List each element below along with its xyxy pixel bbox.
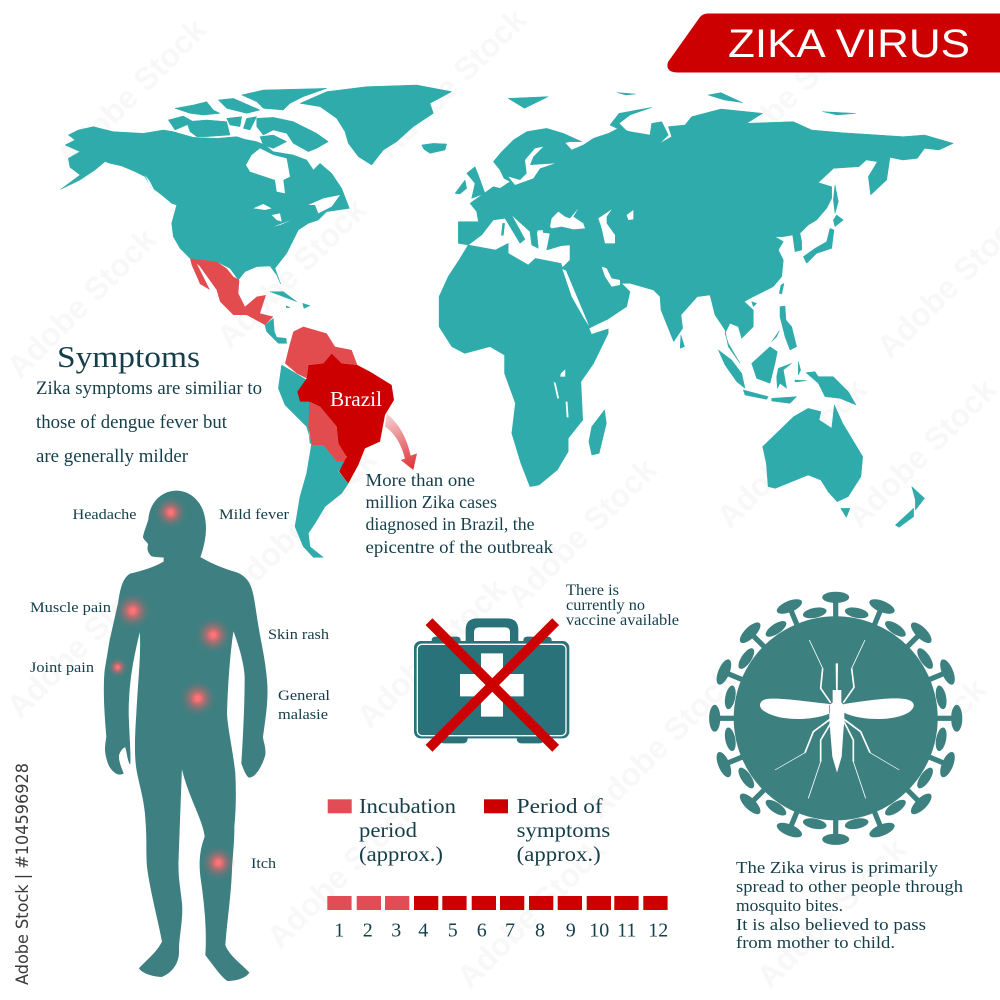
Great Lakes: [253, 204, 292, 227]
Eurasian landmass: [458, 109, 953, 363]
symptom labels: Mild fever: [219, 507, 289, 523]
medical cross: [460, 653, 524, 717]
symptom labels: Skin rash: [268, 627, 330, 643]
human body figure: [104, 491, 267, 981]
text block: symptoms description: Zika symptoms are similiar to: [36, 379, 262, 399]
text: Adobe Stock: [219, 441, 383, 605]
text block: Brazil cases: [366, 470, 553, 557]
timeline numbers: 11: [617, 920, 636, 942]
heading: Symptoms: Symptoms: [57, 339, 200, 374]
text block: transmission: The Zika virus is primarily: [736, 858, 939, 877]
text: Adobe Stock: [829, 671, 993, 835]
mosquito: [760, 640, 914, 798]
legend label: incubation: Incubation: [359, 794, 456, 818]
symptom labels: General: [278, 688, 330, 704]
text block: transmission: It is also believed to pass: [736, 915, 926, 934]
arrow from Brazil: [385, 413, 417, 470]
text block: transmission: [736, 858, 964, 952]
inland seas and gulfs: [508, 147, 633, 334]
Northern South America highlighted: [285, 327, 357, 378]
red X: [429, 622, 556, 748]
Caribbean: [270, 292, 310, 308]
timeline numbers: 12: [648, 920, 668, 942]
legend label: symptoms: [517, 794, 610, 866]
symptom point: knee: [201, 846, 235, 880]
text: Adobe Stock: [579, 661, 743, 825]
symptom labels: Itch: [251, 856, 277, 872]
symptom labels: Muscle pain: [30, 600, 112, 616]
text block: transmission: from mother to child.: [736, 933, 895, 952]
text block: Brazil cases: epicentre of the outbreak: [366, 537, 553, 557]
map: North America: [61, 88, 349, 284]
symptom point: elbow: [108, 657, 128, 677]
legend: [328, 794, 610, 866]
map: Greenland, Mexico, Central America: [190, 85, 452, 343]
Brazil label: Brazil: [330, 387, 382, 411]
legend label: symptoms: symptoms: [517, 818, 610, 842]
symptom labels: Headache: [72, 507, 136, 523]
text: Adobe Stock: [449, 831, 613, 995]
southern and polar islands: [508, 93, 924, 527]
African lakes: [554, 369, 569, 417]
title banner: [667, 14, 1000, 72]
map: South America: [278, 327, 417, 557]
text block: transmission: spread to other people through: [736, 877, 964, 896]
map: Eurasia: [455, 109, 953, 405]
symptom point: chest: [195, 617, 231, 653]
timeline numbers: 9: [566, 920, 576, 942]
symptom point: head: [155, 496, 187, 528]
kit handle: [466, 618, 518, 643]
text block: Brazil cases: More than one: [366, 470, 475, 490]
legend swatch: symptoms: [484, 799, 508, 813]
text block: Brazil cases: diagnosed in Brazil, the: [366, 514, 534, 534]
text: Adobe Stock: [0, 221, 163, 385]
Africa: [439, 243, 608, 487]
text block: symptoms description: are generally milder: [36, 447, 188, 467]
timeline numbers: 3: [391, 920, 401, 942]
Mexico: [190, 258, 273, 325]
text block: symptoms description: [36, 379, 262, 467]
symptom point: abdomen: [180, 680, 216, 716]
Pacific coast inlet: [97, 162, 155, 192]
text block: no vaccine: There is: [566, 582, 619, 599]
timeline numbers: 1: [334, 920, 344, 942]
Central America: [265, 318, 287, 343]
timeline numbers: 6: [477, 920, 487, 942]
timeline numbers: 5: [448, 920, 458, 942]
text: Adobe Stock: [0, 561, 163, 725]
Arctic islands: [168, 88, 328, 152]
kit body: [414, 641, 569, 738]
side credit: Adobe Stock | #104596928: [13, 763, 33, 985]
text: Adobe Stock: [369, 1, 533, 165]
legend label: symptoms: Period of: [517, 794, 604, 818]
Brazil: [297, 353, 394, 483]
text block: no vaccine: currently no: [566, 597, 645, 614]
symptom labels: malasie: [278, 707, 328, 723]
body silhouette: [104, 491, 267, 981]
title banner: ZIKA VIRUS: [728, 22, 970, 66]
text: Adobe Stock: [209, 191, 373, 355]
Greenland: [300, 85, 452, 165]
legend label: symptoms: (approx.): [517, 842, 601, 866]
timeline bars: [327, 896, 668, 910]
text: Adobe Stock: [349, 571, 513, 735]
South American land: [278, 365, 348, 557]
text: Adobe Stock: [709, 371, 873, 535]
Gulf of St Lawrence: [308, 195, 340, 213]
icon: virus with mosquito: [709, 592, 962, 845]
timeline numbers: 7: [505, 920, 515, 942]
legend label: incubation: (approx.): [359, 842, 443, 866]
text block: transmission: mosquito bites.: [736, 896, 843, 915]
legend label: incubation: [359, 794, 456, 866]
North American mainland: [61, 127, 349, 284]
world map: [61, 85, 953, 557]
Iceland: [422, 143, 447, 153]
text block: symptoms description: those of dengue fever but: [36, 413, 228, 433]
symptom labels: Joint pain: [30, 660, 95, 676]
text: Adobe Stock: [499, 451, 663, 615]
Bolivia and Paraguay highlighted: [308, 402, 347, 462]
legend swatch: incubation: [328, 799, 352, 813]
text: Adobe Stock: [49, 11, 213, 175]
icon: first aid kit crossed out: [414, 618, 569, 748]
map: Africa and Oceania: [439, 93, 924, 527]
text block: no vaccine: vaccine available: [566, 612, 679, 629]
timeline numbers: 2: [363, 920, 373, 942]
timeline numbers: [334, 920, 668, 942]
islands: [455, 167, 856, 405]
symptom labels: [30, 507, 330, 872]
Hudson Bay: [246, 148, 290, 193]
virus particle: [709, 592, 962, 845]
text: Adobe Stock: [709, 11, 873, 175]
timeline numbers: 8: [535, 920, 545, 942]
text block: no vaccine: [566, 582, 679, 629]
symptom point: shoulder: [115, 593, 151, 629]
text block: Brazil cases: million Zika cases: [366, 492, 497, 512]
legend label: incubation: period: [359, 818, 417, 842]
text: Adobe Stock: [259, 791, 423, 955]
text: Adobe Stock: [749, 831, 913, 995]
text: Adobe Stock: [839, 371, 1000, 535]
kit clasps and feet: [432, 637, 552, 743]
timeline numbers: 10: [589, 920, 609, 942]
timeline numbers: 4: [418, 920, 428, 942]
